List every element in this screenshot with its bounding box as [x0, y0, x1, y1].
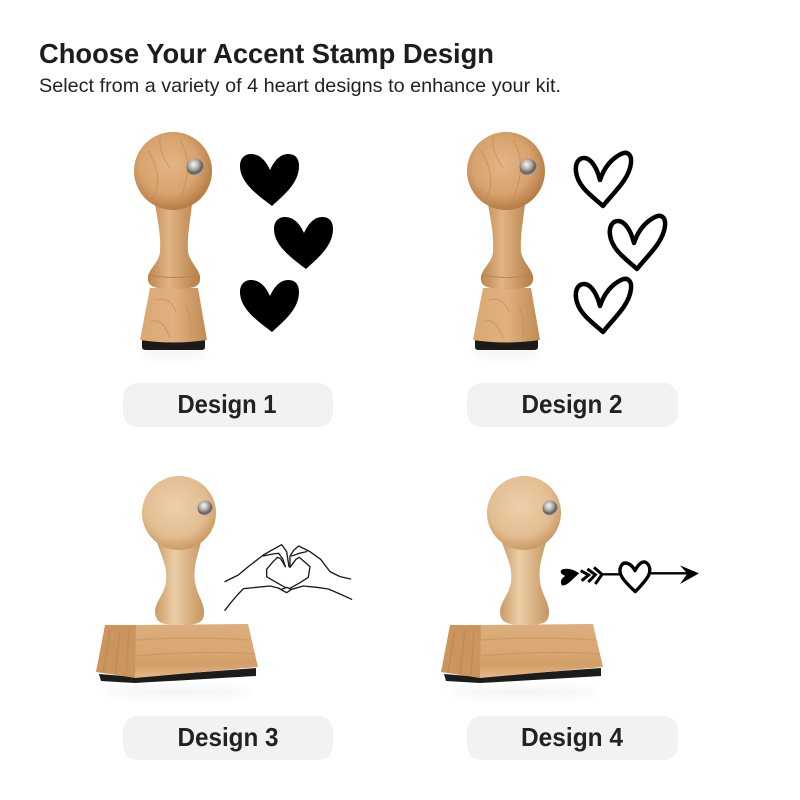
panel: design 3	[96, 476, 352, 760]
label: design 3	[123, 716, 333, 760]
label: design 3: Design 3	[178, 722, 278, 752]
panel: design 2	[467, 132, 678, 427]
label: design 2: Design 2	[522, 389, 622, 419]
label: design 1	[123, 383, 333, 427]
label: design 4: Design 4	[521, 722, 624, 752]
stamp: rectangular wooden stamp 3	[96, 476, 258, 697]
stamp: round wooden stamp 2	[467, 132, 545, 358]
stamp: round wooden stamp 1	[134, 132, 212, 358]
subtitle: Select from a variety of 4 heart designs to enhance your kit.	[39, 75, 561, 97]
icon: outline hearts	[576, 153, 665, 332]
panel: design 4	[441, 476, 699, 760]
icon: solid hearts	[240, 154, 333, 332]
icon: hands forming a heart	[225, 545, 352, 610]
label: design 2	[467, 383, 678, 427]
label: design 1: Design 1	[178, 389, 276, 419]
icon: heart with arrow	[561, 562, 699, 592]
panel: design 1	[123, 132, 333, 427]
title: Choose Your Accent Stamp Design	[39, 38, 494, 69]
label: design 4	[467, 716, 678, 760]
stamp: rectangular wooden stamp 4	[441, 476, 603, 697]
